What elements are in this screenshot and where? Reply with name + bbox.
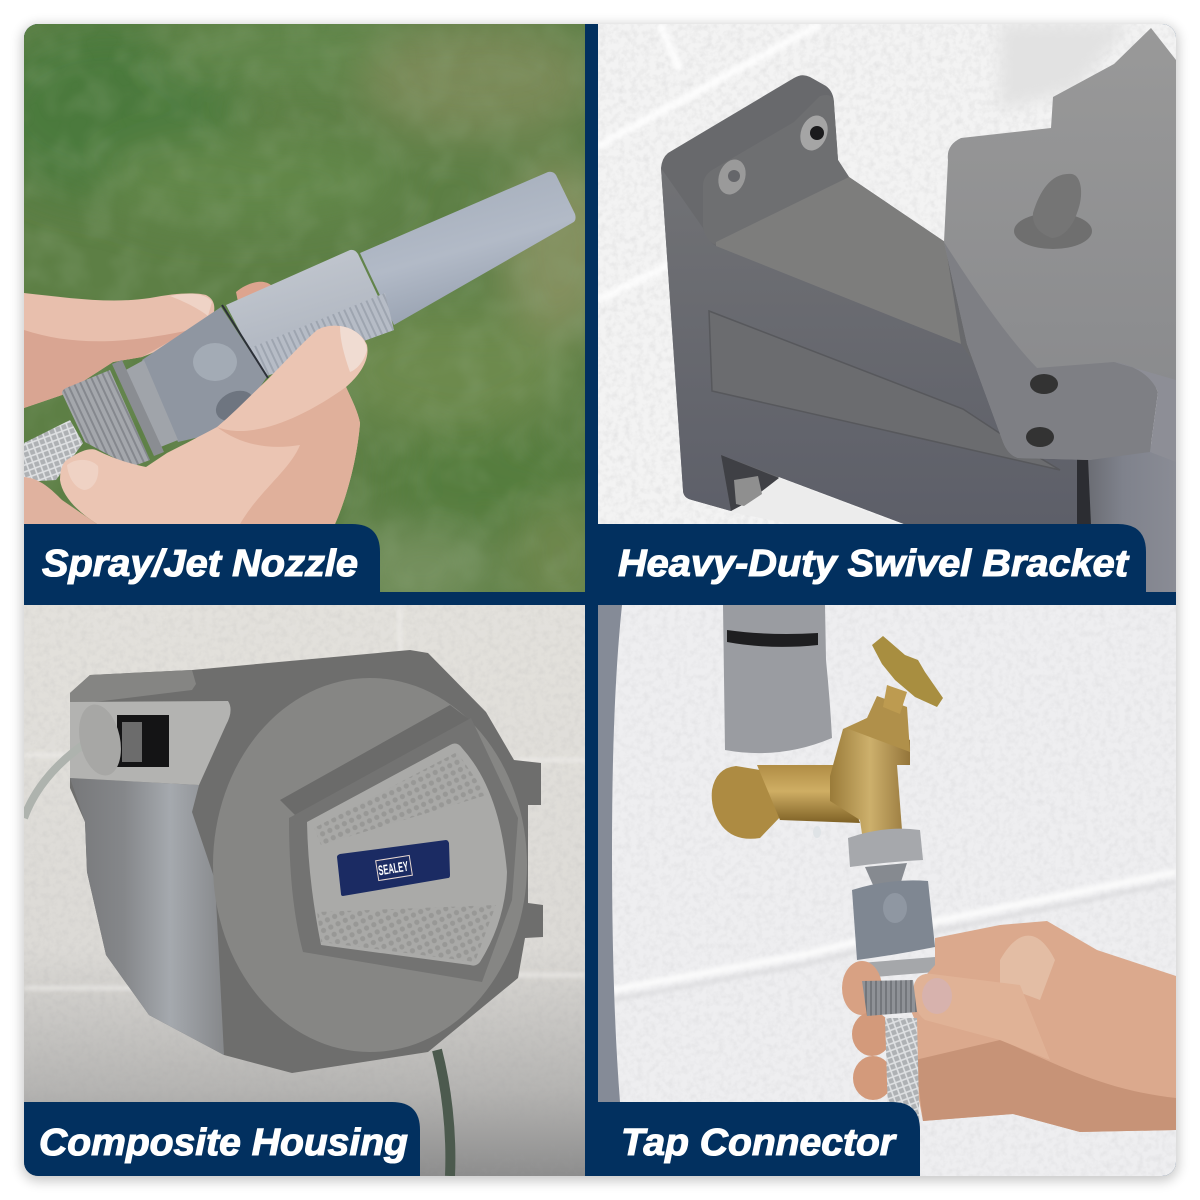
label: tap connector [585,1102,920,1176]
label: heavy-duty swivel bracket [585,524,1146,592]
icon: hose reel housing [24,650,543,1073]
vertical navy divider [585,24,598,1176]
label: composite housing: Composite Housing [39,1122,408,1164]
white brick wall [598,24,1176,524]
hose guide plug and hose [24,701,127,818]
back of hand [909,921,1176,1132]
side drum [70,778,224,1055]
stem [883,685,907,714]
label: tap connector: Tap Connector [621,1122,897,1164]
icon: hose to ground [437,1050,450,1176]
inner plate face [834,100,849,177]
label: spray/jet nozzle: Spray/Jet Nozzle [42,543,358,585]
grass background [24,24,585,592]
top grip texture [314,752,487,845]
icon: hand holding connector [842,921,1176,1132]
knob [1014,174,1092,249]
housing [944,28,1176,460]
painted wall [24,605,585,1176]
thumb [913,974,1050,1060]
wall flange [712,766,782,839]
white brick wall [598,605,1176,1176]
icon: threaded nut [862,980,917,1016]
label: composite housing [24,1102,420,1176]
shadow gap [1077,460,1091,524]
recessed panel [709,311,1060,470]
front face [661,168,1092,540]
bottom grip texture [317,905,496,962]
reel edge [598,605,622,1102]
icon: spray nozzle [62,172,576,467]
icon: finger tip behind nozzle [236,282,271,300]
icon: brass tap [712,636,943,839]
icon: thumb and hand [24,326,368,524]
label: heavy-duty swivel bracket: Heavy-Duty Swivel Bracket [618,543,1129,585]
front plate [307,744,507,966]
panel: heavy-duty swivel bracket photo [598,24,1176,592]
fingers behind hose [842,961,882,1015]
leg [1088,440,1176,592]
valve body and spout [830,718,910,834]
label: spray/jet nozzle [24,524,380,592]
icon: wall bracket [661,28,1176,592]
panel: composite housing photo [24,605,585,1176]
mounting holes [1030,374,1058,394]
panel: tap connector photo [598,605,1176,1176]
icon: upper finger [24,293,214,408]
water drop [813,826,821,838]
horizontal navy divider [24,592,1176,605]
disc [213,678,527,1052]
panel: spray/jet nozzle photo [24,24,585,592]
icon: braided hose [24,420,83,482]
horizontal pipe [757,765,860,823]
rear plate and arm [661,75,974,524]
cable window [117,715,169,767]
bezel [289,718,518,982]
notch wall [731,478,904,526]
bonnet [846,696,910,752]
sealey badge: SEALEY [377,858,410,878]
sealey badge [337,840,450,896]
t-handle [872,636,943,707]
icon: grey tap connector [848,829,935,978]
thumb nail [922,978,952,1014]
light front band [70,701,231,785]
icon: braided hose [885,1018,920,1150]
top surface [716,177,961,344]
bolts [714,112,832,506]
dark wedge [280,705,470,820]
roof [70,670,196,705]
icon: pipe insulation [723,605,832,753]
